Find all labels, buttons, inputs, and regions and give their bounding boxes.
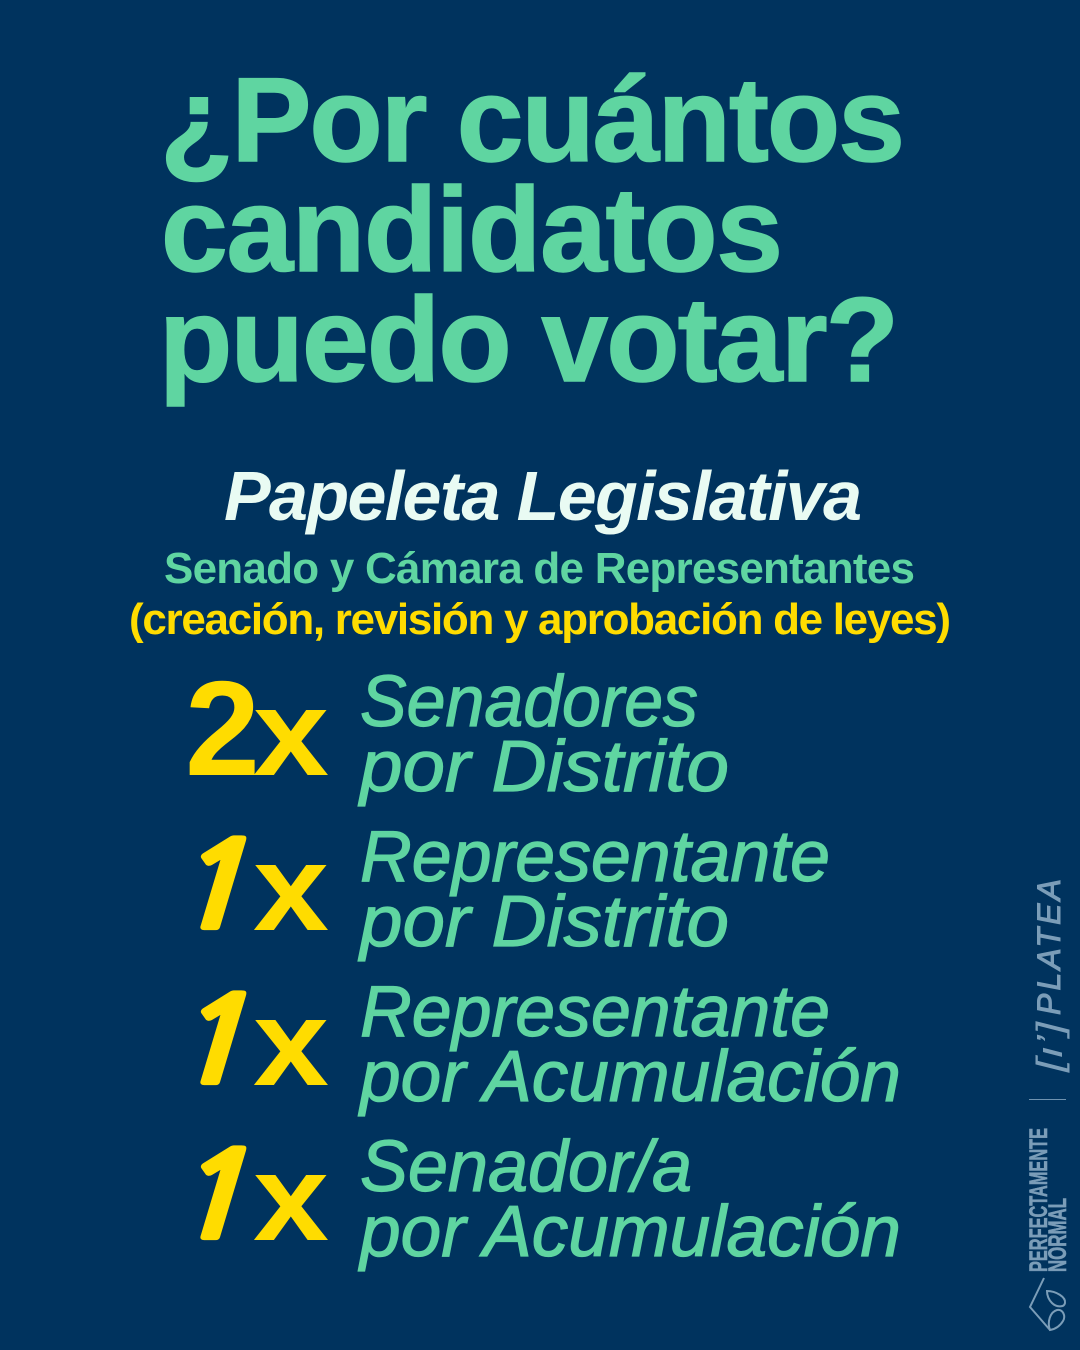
row: 2x Senadores por Distrito: por Distrito <box>358 727 729 807</box>
logo: Platea: PLATEA <box>1031 879 1067 1015</box>
row: 1x Representante por Distrito: por Distrito <box>358 882 729 962</box>
row: 1x Representante por Distrito: Representante <box>360 817 830 897</box>
row: 2x Senadores por Distrito: Senadores <box>360 662 698 742</box>
row: 1x Senador/a por Acumulación <box>163 1127 901 1272</box>
title: puedo votar? <box>159 273 899 407</box>
row: 1x Representante por Acumulación: Representante <box>360 972 830 1052</box>
row: 1x Representante por Acumulación: 1 <box>163 983 250 1101</box>
logo: Platea: [ı’] <box>1029 1021 1070 1073</box>
title <box>159 53 905 407</box>
row: 1x Representante por Acumulación: por Acumulación <box>358 1037 901 1117</box>
logo: Perfectamente Normal <box>1025 1128 1072 1330</box>
heading: Papeleta Legislativa: Papeleta Legislativa <box>224 457 862 535</box>
title: ¿Por cuántos <box>160 53 905 187</box>
icon: glasses <box>1030 1278 1065 1330</box>
row: 2x Senadores por Distrito <box>185 653 729 807</box>
row: 1x Senador/a por Acumulación: 1 <box>163 1138 250 1256</box>
divider <box>1029 1099 1066 1100</box>
logo: Perfectamente Normal: NORMAL <box>1044 1198 1072 1272</box>
row: 1x Senador/a por Acumulación: por Acumulación <box>358 1192 901 1272</box>
row: 2x Senadores por Distrito: x <box>253 665 329 802</box>
subheading: function of the legislature: (creación, revisión y aprobación de leyes) <box>129 595 951 644</box>
title: candidatos <box>161 163 783 297</box>
row: 1x Representante por Distrito: 1 <box>163 828 250 946</box>
logo: Platea <box>1029 879 1070 1073</box>
row: 1x Senador/a por Acumulación: x <box>253 1130 329 1267</box>
row: 2x Senadores por Distrito: 2 <box>185 653 260 804</box>
subheading: Senado y Cámara de Representantes: Senado y Cámara de Representantes <box>164 544 915 593</box>
row: 1x Representante por Distrito: x <box>253 820 329 957</box>
row: 1x Representante por Acumulación <box>163 972 901 1117</box>
logo: Perfectamente Normal: PERFECTAMENTE <box>1025 1128 1053 1272</box>
row: 1x Representante por Acumulación: x <box>253 975 329 1112</box>
row: 1x Representante por Distrito <box>163 817 830 962</box>
row: 1x Senador/a por Acumulación: Senador/a <box>360 1127 692 1207</box>
